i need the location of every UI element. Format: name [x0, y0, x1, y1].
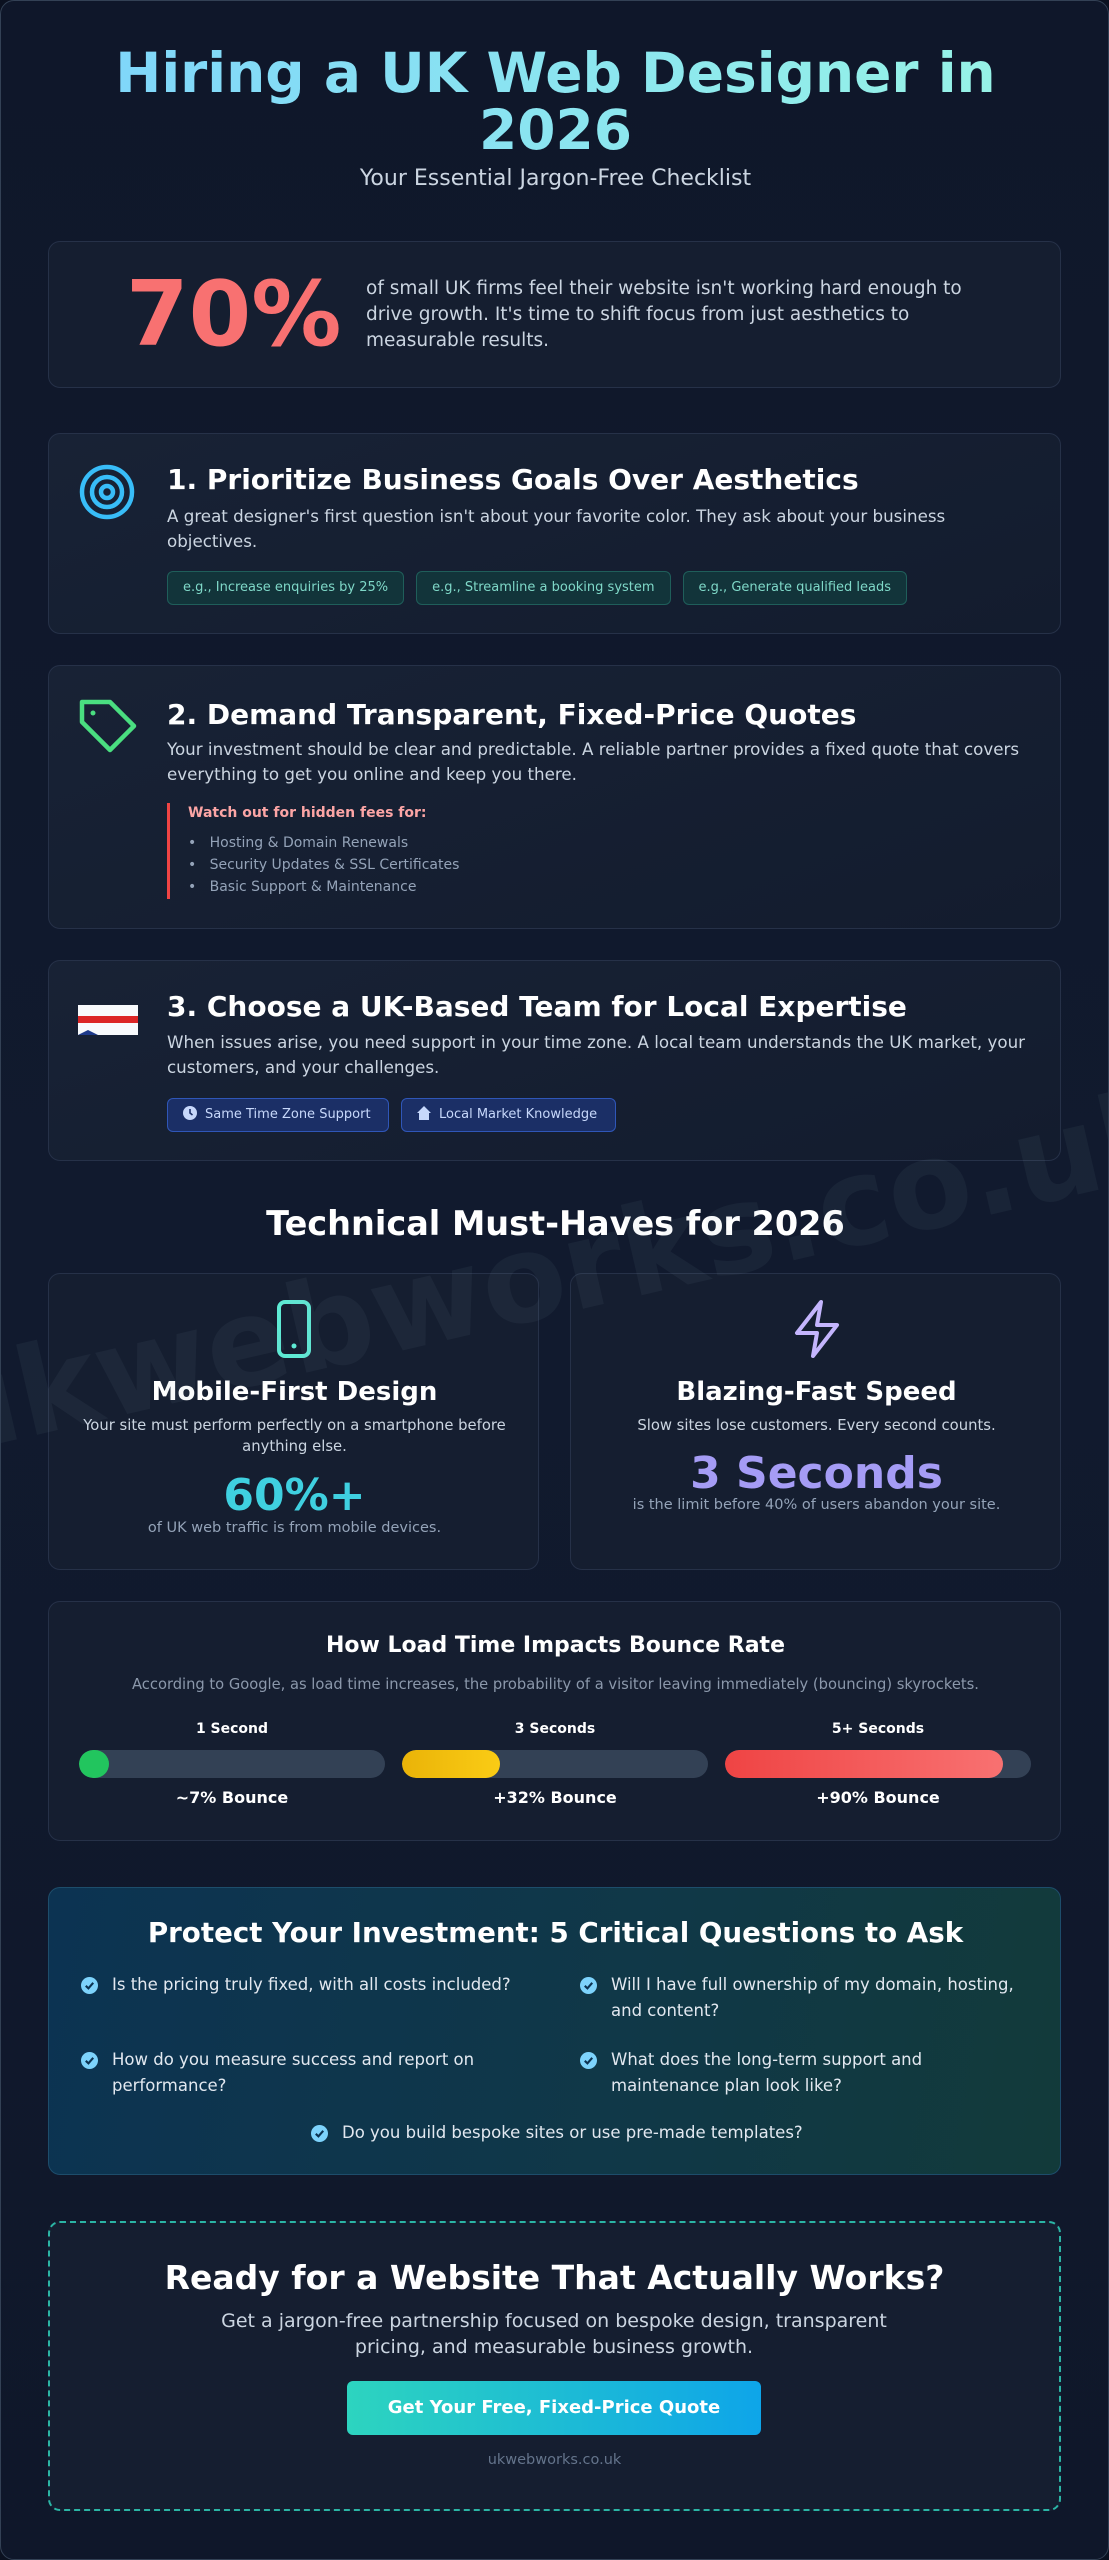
tags: Same Time Zone Support	[205, 1107, 371, 1122]
callout: hidden fees: • Security Updates & SSL Certificates	[188, 857, 459, 873]
subtitle: Your Essential Jargon-Free Checklist	[360, 166, 751, 191]
stat: 3 Seconds	[690, 1448, 943, 1499]
stat caption: of UK web traffic is from mobile devices.	[148, 1520, 441, 1536]
title: Mobile-First Design	[152, 1377, 437, 1407]
title: Blazing-Fast Speed	[676, 1377, 957, 1407]
tags: e.g., Streamline a booking system	[432, 580, 655, 595]
description: When issues arise, you need support in your time zone. A local team understands the UK market, your customers, and your challenges.	[167, 1032, 1025, 1077]
question 4: What does the long-term support and maintenance plan look like?	[611, 2050, 922, 2095]
heading: 3. Choose a UK-Based Team for Local Expertise	[167, 990, 907, 1023]
title	[1, 45, 1109, 159]
panel: goals	[48, 433, 1061, 634]
panel title: Protect Your Investment: 5 Critical Questions to Ask	[148, 1916, 963, 1949]
bar: 1 second: ~7% Bounce	[176, 1788, 288, 1807]
panel: speed	[570, 1273, 1061, 1570]
icon: lightning	[794, 1300, 840, 1358]
bar: 3 seconds: 3 Seconds	[515, 1721, 595, 1737]
bar: 5+ seconds: +90% Bounce	[816, 1788, 940, 1807]
question 2: Will I have full ownership of my domain, hosting, and content?	[611, 1975, 1014, 2020]
tags: e.g., Generate qualified leads	[699, 580, 891, 595]
bar: 5+ seconds	[725, 1721, 1031, 1807]
bar: 1 second	[79, 1721, 385, 1807]
callout: hidden fees	[167, 803, 667, 899]
question 1: Is the pricing truly fixed, with all costs included?	[112, 1975, 511, 1994]
description: Your investment should be clear and predictable. A reliable partner provides a fixed quote that covers everything to get you online and keep you there.	[167, 739, 1019, 784]
icon: flag	[78, 1005, 138, 1035]
CTA button	[347, 2381, 761, 2435]
question 3: How do you measure success and report on performance?	[112, 2050, 474, 2095]
chart title: How Load Time Impacts Bounce Rate	[326, 1633, 785, 1658]
bar: 3 seconds: +32% Bounce	[493, 1788, 617, 1807]
icon: target	[80, 464, 134, 520]
heading: technical must-haves: Technical Must-Haves for 2026	[266, 1204, 845, 1243]
URL: ukwebworks.co.uk	[488, 2452, 621, 2468]
icon: phone	[277, 1300, 311, 1358]
panel: critical questions	[48, 1887, 1061, 2175]
description: Slow sites lose customers. Every second counts.	[637, 1417, 996, 1434]
question 5: Do you build bespoke sites or use pre-made templates?	[342, 2123, 803, 2142]
bar: 5+ seconds: 5+ Seconds	[832, 1721, 924, 1737]
panel: 70% stat	[48, 241, 1061, 388]
heading: 1. Prioritize Business Goals Over Aesthetics	[167, 463, 859, 496]
tags: e.g., Increase enquiries by 25%	[183, 580, 388, 595]
panel: UK team	[48, 960, 1061, 1161]
chart subtitle: According to Google, as load time increases, the probability of a visitor leaving immediately (bouncing) skyrockets.	[132, 1676, 979, 1693]
callout: hidden fees: • Basic Support & Maintenance	[188, 879, 416, 895]
tags	[167, 1098, 616, 1132]
callout: hidden fees: • Hosting & Domain Renewals	[188, 835, 408, 851]
stat number: 70%	[126, 262, 341, 367]
panel: call to action	[48, 2221, 1061, 2511]
tags: Local Market Knowledge	[439, 1107, 597, 1122]
stat caption: is the limit before 40% of users abandon your site.	[633, 1497, 1000, 1513]
title: 2026	[479, 98, 632, 162]
bar: 3 seconds	[402, 1721, 708, 1807]
heading: 2. Demand Transparent, Fixed-Price Quotes	[167, 698, 856, 731]
CTA description: Get a jargon-free partnership focused on bespoke design, transparent pricing, and measurable business growth.	[221, 2310, 887, 2358]
stat text: of small UK firms feel their website isn't working hard enough to drive growth. It's time to shift focus from just aesthetics to measurable results.	[366, 278, 962, 351]
CTA heading: Ready for a Website That Actually Works?	[165, 2258, 944, 2297]
callout: hidden fees: Watch out for hidden fees for:	[188, 805, 427, 821]
stat: 60%+	[223, 1470, 366, 1521]
title: Hiring a UK Web Designer in	[115, 41, 996, 105]
CTA button: Get Your Free, Fixed-Price Quote	[388, 2397, 720, 2418]
panel: mobile-first	[48, 1273, 539, 1570]
icon: price tag	[80, 700, 136, 752]
panel: bounce rate chart	[48, 1601, 1061, 1841]
description: A great designer's first question isn't about your favorite color. They ask about your business objectives.	[167, 506, 945, 551]
panel: pricing	[48, 665, 1061, 929]
description: Your site must perform perfectly on a smartphone before anything else.	[83, 1417, 506, 1455]
tags	[167, 571, 907, 605]
bar: 1 second: 1 Second	[196, 1721, 268, 1737]
